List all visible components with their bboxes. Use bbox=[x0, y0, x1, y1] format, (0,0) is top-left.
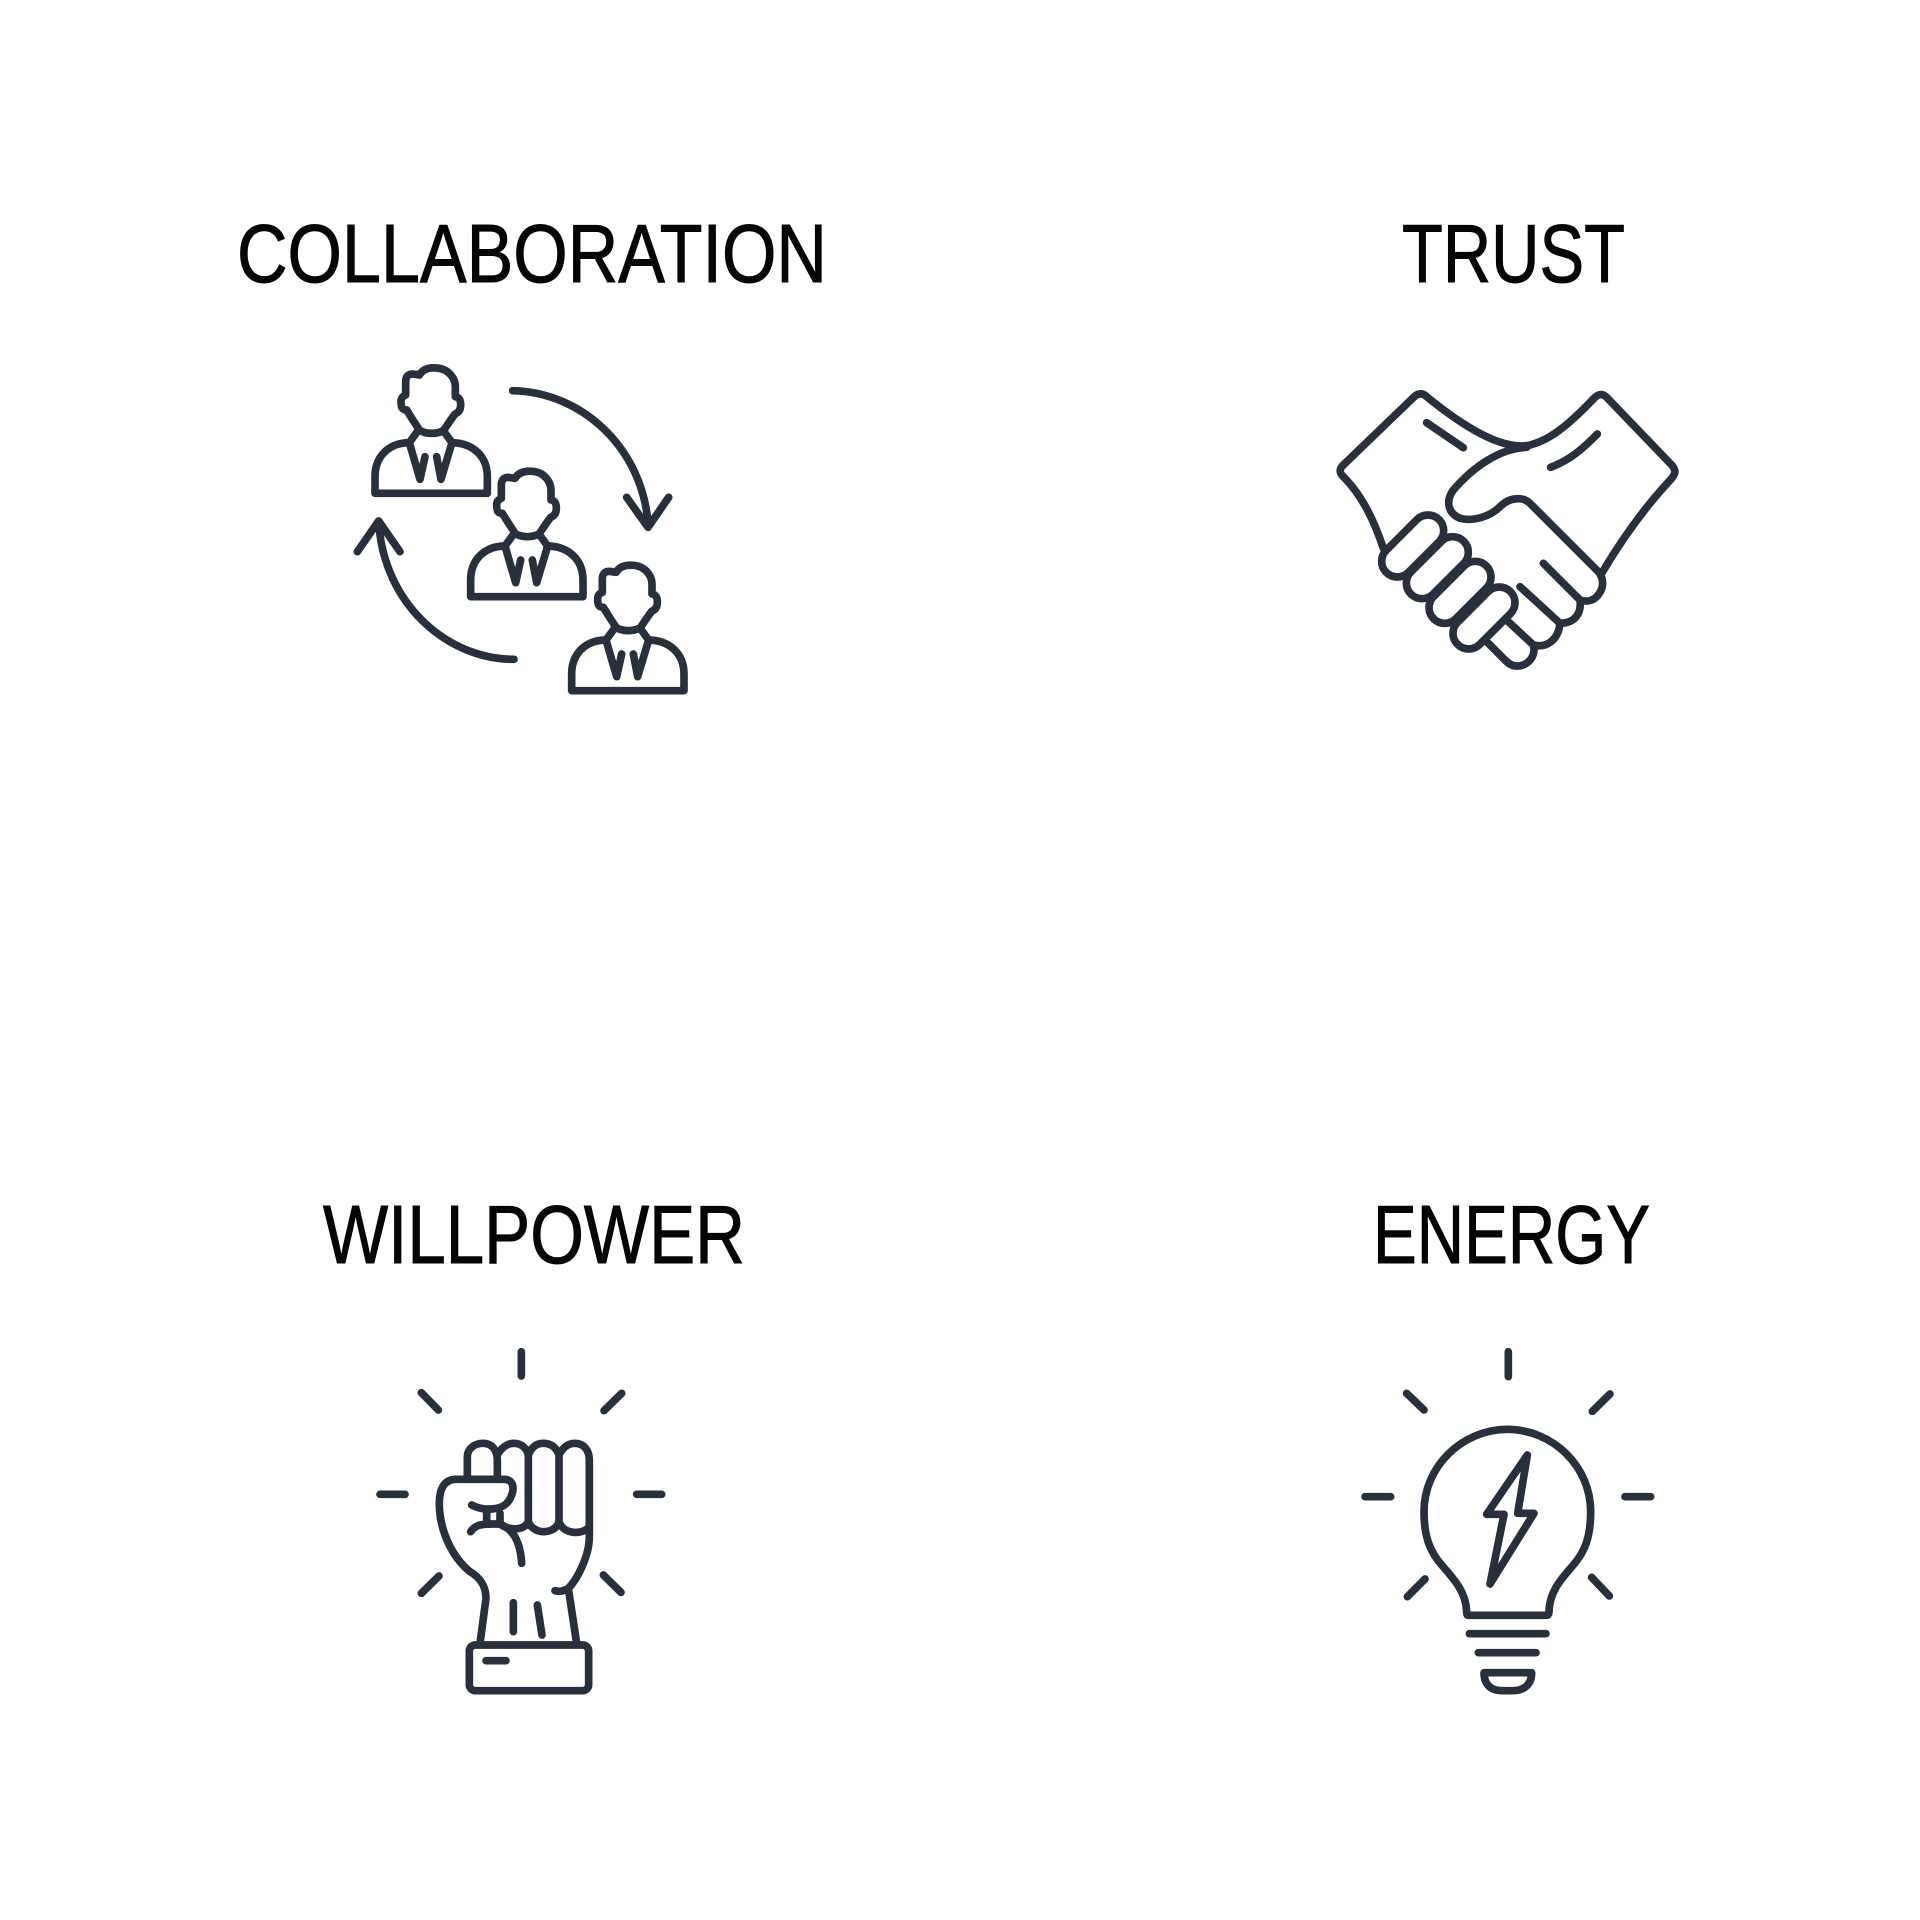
left hand finger four bbox=[1447, 581, 1521, 655]
left hand finger one bbox=[1375, 509, 1450, 583]
heading: energy: ENERGY bbox=[1373, 1188, 1650, 1281]
left hand finger two bbox=[1400, 530, 1475, 605]
left hand finger three bbox=[1423, 555, 1497, 630]
right hand with thumb and fingers bbox=[1449, 447, 1603, 666]
icon: collaboration, three people with cycle arrows bbox=[357, 368, 684, 691]
heading: collaboration: COLLABORATION bbox=[237, 207, 827, 300]
arrow: clockwise top right bbox=[513, 391, 669, 527]
rays bbox=[380, 1352, 662, 1593]
cuff button bbox=[486, 1649, 506, 1672]
icon: energy, light bulb with bolt bbox=[1365, 1352, 1651, 1691]
rays bbox=[1365, 1352, 1651, 1597]
heading: trust: TRUST bbox=[1402, 207, 1625, 300]
base lines bbox=[1469, 1634, 1546, 1653]
heading: willpower: WILLPOWER bbox=[323, 1188, 745, 1281]
base cap bbox=[1484, 1673, 1532, 1691]
person one bbox=[375, 368, 487, 493]
person three bbox=[572, 565, 684, 691]
fingers bbox=[467, 1443, 589, 1591]
person two bbox=[471, 471, 583, 597]
lightning bolt bbox=[1487, 1455, 1534, 1584]
wrist creases bbox=[1427, 423, 1597, 467]
icon: trust, handshake bbox=[1340, 394, 1675, 666]
wrist bbox=[513, 1588, 577, 1643]
arrow: clockwise bottom left bbox=[357, 521, 514, 659]
thumb and palm bbox=[439, 1479, 522, 1643]
icon: willpower, raised fist with rays bbox=[380, 1352, 662, 1691]
bulb bbox=[1424, 1429, 1591, 1615]
cuffs and wrists bbox=[1340, 394, 1675, 573]
cuff bbox=[469, 1645, 589, 1691]
